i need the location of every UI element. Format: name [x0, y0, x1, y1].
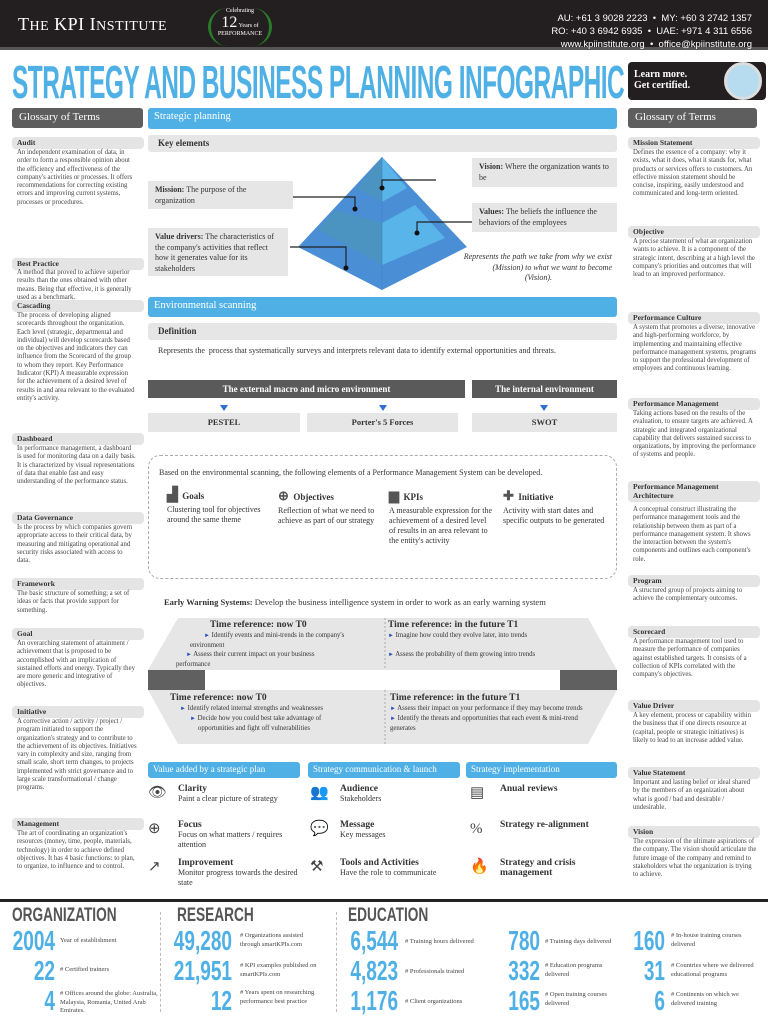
stats: research: # KPI examples published on smartKPIs.com — [240, 962, 317, 978]
early warning diagram: performance — [176, 661, 210, 668]
goals — [166, 486, 261, 524]
key elements heading: Key elements — [158, 138, 209, 148]
left glossary — [12, 108, 144, 870]
learn more badge: Get certified. — [634, 80, 690, 91]
definition text: Represents the process that systematically surveys and interprets relevant data to identify external opportunities and threats. — [158, 346, 556, 355]
right glossary: A structured group of projects aiming to achieve the complementary outcomes. — [633, 587, 742, 602]
left glossary: A method that proved to achieve superior results than the ones obtained with other means. Being that effective, it is generally used as a benchmark. — [17, 269, 132, 301]
internal environment bar: The internal environment — [495, 384, 594, 394]
stats: education: # Continents on which we delivered training — [671, 991, 739, 1006]
pyramid — [290, 157, 472, 290]
contacts: AU: +61 3 9028 2223 • MY: +60 3 2742 1357 — [557, 13, 752, 24]
communication column: 👥 — [310, 785, 329, 801]
right glossary — [628, 108, 760, 878]
right glossary: A system that promotes a diverse, innovative and high-performing workforce, by implementing and maintaining effective performance management systems, programs to support the professional development of employees and continuous learning. — [633, 324, 756, 372]
kpis: A measurable expression for the achievement of a desired level of results in an area relevant to the entity's activity — [389, 506, 492, 545]
early warning diagram: ► Identify related internal strengths and weaknesses — [180, 705, 323, 712]
Porter: Porter's 5 Forces — [352, 417, 413, 427]
right glossary: Program — [633, 576, 662, 585]
divider line — [0, 899, 768, 902]
right glossary: Performance Management — [633, 399, 719, 408]
stats: organization: # Offices around the globe: Australia, Malaysia, Romania, United Arab Emirates. — [60, 990, 158, 1014]
early warning diagram: opportunities and fight off vulnerabilities — [198, 725, 310, 732]
right glossary: Taking actions based on the results of the evaluation, to ensure targets are achieved. A strategic and integrated organizational capability that delivers sustained success to organizations, by improving the performance of systems and people. — [633, 410, 756, 458]
right glossary: Defines the essence of a company: why it exists, what it does, what it stands for, what products or services offers to customers. An effective mission statement should be concise, inspiring, easily understood and communicated and long-term oriented. — [633, 149, 752, 197]
stats: education: # Open training courses delivered — [545, 991, 607, 1006]
implementation column — [466, 762, 617, 878]
pyramid caption: Represents the path we take from why we exist (Mission) to what we want to become (Vision). — [464, 252, 612, 282]
communication column: Strategy communication & launch — [313, 764, 437, 774]
stats: organization — [12, 905, 158, 1016]
value added column: Value added by a strategic plan — [153, 764, 265, 774]
stats: education: 780 — [508, 925, 540, 956]
stats: education: 332 — [508, 955, 540, 986]
environmental scanning heading: Environmental scanning — [154, 300, 256, 311]
communication column: Stakeholders — [340, 794, 381, 803]
badge: Celebrating — [226, 8, 254, 14]
communication column — [308, 762, 460, 877]
left glossary: Audit — [17, 138, 35, 147]
communication column: Audience — [340, 784, 378, 794]
value added column — [148, 762, 300, 887]
stats: organization: 2004 — [13, 925, 55, 956]
right glossary: Vision — [633, 827, 653, 836]
value added column: Improvement — [178, 858, 233, 868]
implementation column: Strategy and crisis management — [500, 858, 575, 878]
badge: 12 Years of — [221, 14, 259, 31]
left glossary: Goal — [17, 629, 32, 638]
PESTEL: PESTEL — [208, 417, 240, 427]
value added column: ⊕ — [148, 821, 161, 837]
value added column: Monitor progress towards the desired state — [178, 868, 298, 887]
mission box — [148, 181, 293, 209]
title: STRATEGY AND BUSINESS PLANNING INFOGRAPHIC — [12, 56, 624, 108]
early warning diagram: Time reference: in the future T1 — [388, 620, 518, 630]
stats: education: 165 — [508, 985, 540, 1016]
right glossary: Value Statement — [633, 768, 685, 777]
SWOT — [472, 413, 617, 432]
stats: education: 4,823 — [350, 955, 398, 986]
right glossary: A performance management tool used to measure the performance of companies against established targets. It consists of a collection of KPIs correlated with the company's objectives. — [633, 638, 747, 678]
early warning diagram — [148, 618, 617, 744]
values box — [472, 203, 617, 232]
early warning diagram: ► Identify the threats and opportunities that each event & mini-trend generates — [390, 715, 578, 732]
kpis: ▆ KPIs — [389, 488, 423, 503]
left glossary: Initiative — [17, 707, 46, 716]
definition heading: Definition — [158, 326, 197, 336]
learn more badge — [628, 62, 766, 100]
objectives — [278, 488, 374, 525]
communication column: 💬 — [310, 821, 329, 837]
stats: research: # Years spent on researching performance best practice — [240, 989, 314, 1004]
right glossary: Value Driver — [633, 701, 674, 710]
value added column: Clarity — [178, 784, 207, 794]
right glossary: Objective — [633, 227, 664, 236]
communication column: Have the role to communicate — [340, 868, 436, 877]
early warning diagram: Time reference: now T0 — [170, 693, 267, 703]
left glossary: Data Governance — [17, 513, 73, 522]
early warning diagram: Time reference: in the future T1 — [390, 693, 520, 703]
contacts — [551, 13, 752, 50]
stats: education: 6,544 — [350, 925, 398, 956]
implementation column: 🔥 — [470, 859, 489, 875]
stats: education: # Training days delivered — [545, 938, 611, 945]
performance management elements panel: Based on the environmental scanning, the following elements of a Performance Management System can be developed. — [159, 468, 542, 477]
logo: THE KPI INSTITUTE — [18, 14, 167, 34]
early warning diagram: ► Assess their current impact on your business — [186, 651, 314, 658]
stats: education: # Countries where we delivered educational programs — [671, 962, 754, 978]
SWOT: SWOT — [532, 417, 557, 427]
early warning diagram: Time reference: now T0 — [210, 620, 307, 630]
left glossary: Dashboard — [17, 434, 52, 443]
implementation column: Strategy re-alignment — [500, 820, 589, 830]
initiative: Activity with start dates and specific outputs to be generated — [503, 506, 604, 525]
left glossary: Glossary of Terms — [19, 111, 100, 123]
left glossary: Cascading — [17, 301, 50, 310]
value added column: Focus on what matters / requires attention — [178, 830, 282, 849]
early warning diagram: ► Imagine how could they evolve later, into trends — [388, 632, 527, 639]
strategic planning heading: Strategic planning — [154, 111, 231, 122]
objectives: ⊕ Objectives — [278, 488, 334, 503]
stats: research: # Organizations assisted through smartKPIs.com — [240, 932, 303, 948]
stats: education: 160 — [633, 925, 665, 956]
early warning: Early Warning Systems: Develop the business intelligence system in order to work as an early warning system — [164, 597, 546, 607]
value added column: Paint a clear picture of strategy — [178, 794, 278, 803]
strategic planning heading — [148, 108, 617, 129]
early warning diagram: environment — [190, 642, 224, 649]
stats: research — [174, 905, 317, 1016]
PESTEL — [148, 413, 300, 432]
arrows — [220, 405, 228, 411]
early warning diagram: ► Decide how you could best take advantage of — [190, 715, 321, 722]
value added column: ↗ — [148, 859, 161, 875]
right glossary: Mission Statement — [633, 138, 692, 147]
stats: education: # In-house training courses delivered — [671, 932, 742, 948]
values box: Values: The beliefs the influence the behaviors of the employees — [479, 207, 597, 226]
right glossary: Performance Culture — [633, 313, 701, 322]
implementation column: Strategy implementation — [471, 764, 560, 774]
definition heading — [148, 323, 617, 340]
stats: education: # Professionals trained — [405, 968, 464, 975]
stats: organization: Year of establishment — [60, 937, 116, 944]
stats: education — [348, 905, 754, 1016]
stats: education: 6 — [654, 985, 665, 1016]
early warning diagram: ► Assess the probability of them growing intro trends — [388, 651, 535, 658]
initiative: ✚ Initiative — [503, 488, 553, 503]
communication column: Tools and Activities — [340, 858, 419, 868]
initiative — [503, 488, 604, 525]
contacts: www.kpiinstitute.org • office@kpiinstitute.org — [561, 39, 752, 50]
stats: research: RESEARCH — [177, 905, 254, 926]
stats: research: 49,280 — [174, 925, 232, 956]
left glossary: An overarching statement of attainment / achievement that is proposed to be accomplished with an implication of sustained efforts and energy. Typically they are more generic and integrative of objectives. — [17, 640, 135, 688]
vision box — [472, 158, 617, 187]
right glossary: A conceptual construct illustrating the performance management tools and the relationship between them as part of a performance management system. It shows the interaction between the system's components and outlines each component's role. — [633, 506, 751, 563]
left glossary: Is the process by which companies govern appropriate access to their critical data, by measuring and mitigating operational and security risks associated with access to data. — [17, 524, 132, 564]
left glossary: The process of developing aligned scorecards throughout the organization. Each level (strategic, departmental and individual) will develop scorecards based on the objectives and indicators they can influence from the Scorecard of the group to whom they report. Key Performance Indicator (KPI) A measurable expression for the achievement of a desired level of results in and area relevant to the evaluated entity's activity. — [17, 312, 135, 402]
stats: organization: # Certified trainers — [60, 966, 109, 973]
mission box: Mission: The purpose of the organization — [155, 185, 246, 204]
stats: education: EDUCATION — [348, 905, 428, 926]
right glossary: The expression of the ultimate aspirations of the company. The vision should articulate the future image of the company and remind to stakeholders what the organization is trying to achieve. — [633, 838, 756, 878]
left glossary: The art of coordinating an organization's resources (money, time, people, materials, technology) in order to achieve defined objectives. It has 4 basic functions: to plan, to organize, to influence and to control. — [17, 830, 135, 870]
left glossary: The basic structure of something; a set of ideas or facts that provide support for something. — [17, 590, 129, 614]
value added column: 👁 — [148, 785, 167, 801]
right glossary: A key element, process or capability within the business that if one directs resource at (capital, people or strategic initiatives) is likely to lead to an increase added value. — [633, 712, 751, 744]
vision box: Vision: Where the organization wants to be — [479, 162, 609, 182]
performance management elements panel — [148, 455, 617, 579]
kpis — [388, 488, 492, 545]
right glossary: Important and lasting belief or ideal shared by the members of an organization about what is good / bad and desirable / undesirable. — [633, 779, 750, 811]
left glossary: Best Practice — [17, 259, 59, 268]
external environment bar: The external macro and micro environment — [223, 384, 390, 394]
value drivers box: Value drivers: The characteristics of the company's activities that reflect how it generates value for its stakeholders — [155, 232, 274, 272]
communication column: ⚒ — [310, 859, 323, 875]
stats: education: 31 — [644, 955, 665, 986]
stats: organization: ORGANIZATION — [12, 905, 117, 926]
badge — [208, 8, 272, 46]
implementation column: % — [470, 821, 482, 837]
stats: research: 12 — [211, 985, 232, 1016]
stats: education: 1,176 — [350, 985, 398, 1016]
right glossary: A precise statement of what an organization wants to achieve. It is a component of the strategic intent, describing at a high level the company's priorities and outcomes that will lead to an improved performance. — [633, 238, 755, 278]
external environment bar — [148, 380, 465, 398]
goals: ▟ Goals — [167, 488, 204, 503]
internal environment bar — [472, 380, 617, 398]
stats: education: # Education programs delivered — [545, 962, 602, 978]
stats: research: 21,951 — [174, 955, 232, 986]
value added column: Focus — [178, 820, 202, 830]
right glossary: Glossary of Terms — [635, 111, 716, 123]
badge: PERFORMANCE — [218, 31, 262, 37]
stats: education: # Client organizations — [405, 998, 462, 1005]
contacts: RO: +40 3 6942 6935 • UAE: +971 4 311 6556 — [551, 26, 752, 37]
learn more badge: Learn more. — [634, 69, 687, 80]
environmental scanning heading — [148, 297, 617, 317]
Porter — [307, 413, 458, 432]
left glossary: A corrective action / activity / project / program initiated to support the organization's strategy and to contribute to the achievement of its objectives. Initiatives vary in complexity and size, ranging from small scale, short term changes, to projects implemented with strict governance and to large scale transformational / change programs. — [17, 718, 137, 791]
stats: education: # Training hours delivered — [405, 938, 474, 945]
left glossary: An independent examination of data, in order to form a responsible opinion about the efficiency and effectiveness of the company's activities or processes. It offers recommendations for correcting existing errors and improving current systems, processes or procedures. — [17, 149, 132, 206]
goals: Clustering tool for objectives around the same theme — [167, 505, 261, 524]
objectives: Reflection of what we need to achieve as part of our strategy — [278, 506, 374, 525]
implementation column: ▤ — [470, 785, 484, 801]
early warning diagram: ► Assess their impact on your performance if they may become trends — [390, 705, 583, 712]
communication column: Key messages — [340, 830, 386, 839]
implementation column: Anual reviews — [500, 784, 558, 794]
left glossary: Management — [17, 819, 59, 828]
early warning diagram: ► Identify events and mini-trends in the company's — [204, 632, 344, 639]
key elements heading — [148, 135, 617, 152]
right glossary: Scorecard — [633, 627, 665, 636]
left glossary: In performance management, a dashboard is used for monitoring data on a daily basis. It is characterized by visual representations of data that enable fast and easy understanding of the performance status. — [17, 445, 136, 485]
header bar — [0, 0, 768, 50]
communication column: Message — [340, 820, 374, 830]
stats: organization: 4 — [44, 985, 55, 1016]
right glossary: Performance Management Architecture — [633, 482, 719, 500]
left glossary: Framework — [17, 579, 55, 588]
stats: organization: 22 — [34, 955, 55, 986]
